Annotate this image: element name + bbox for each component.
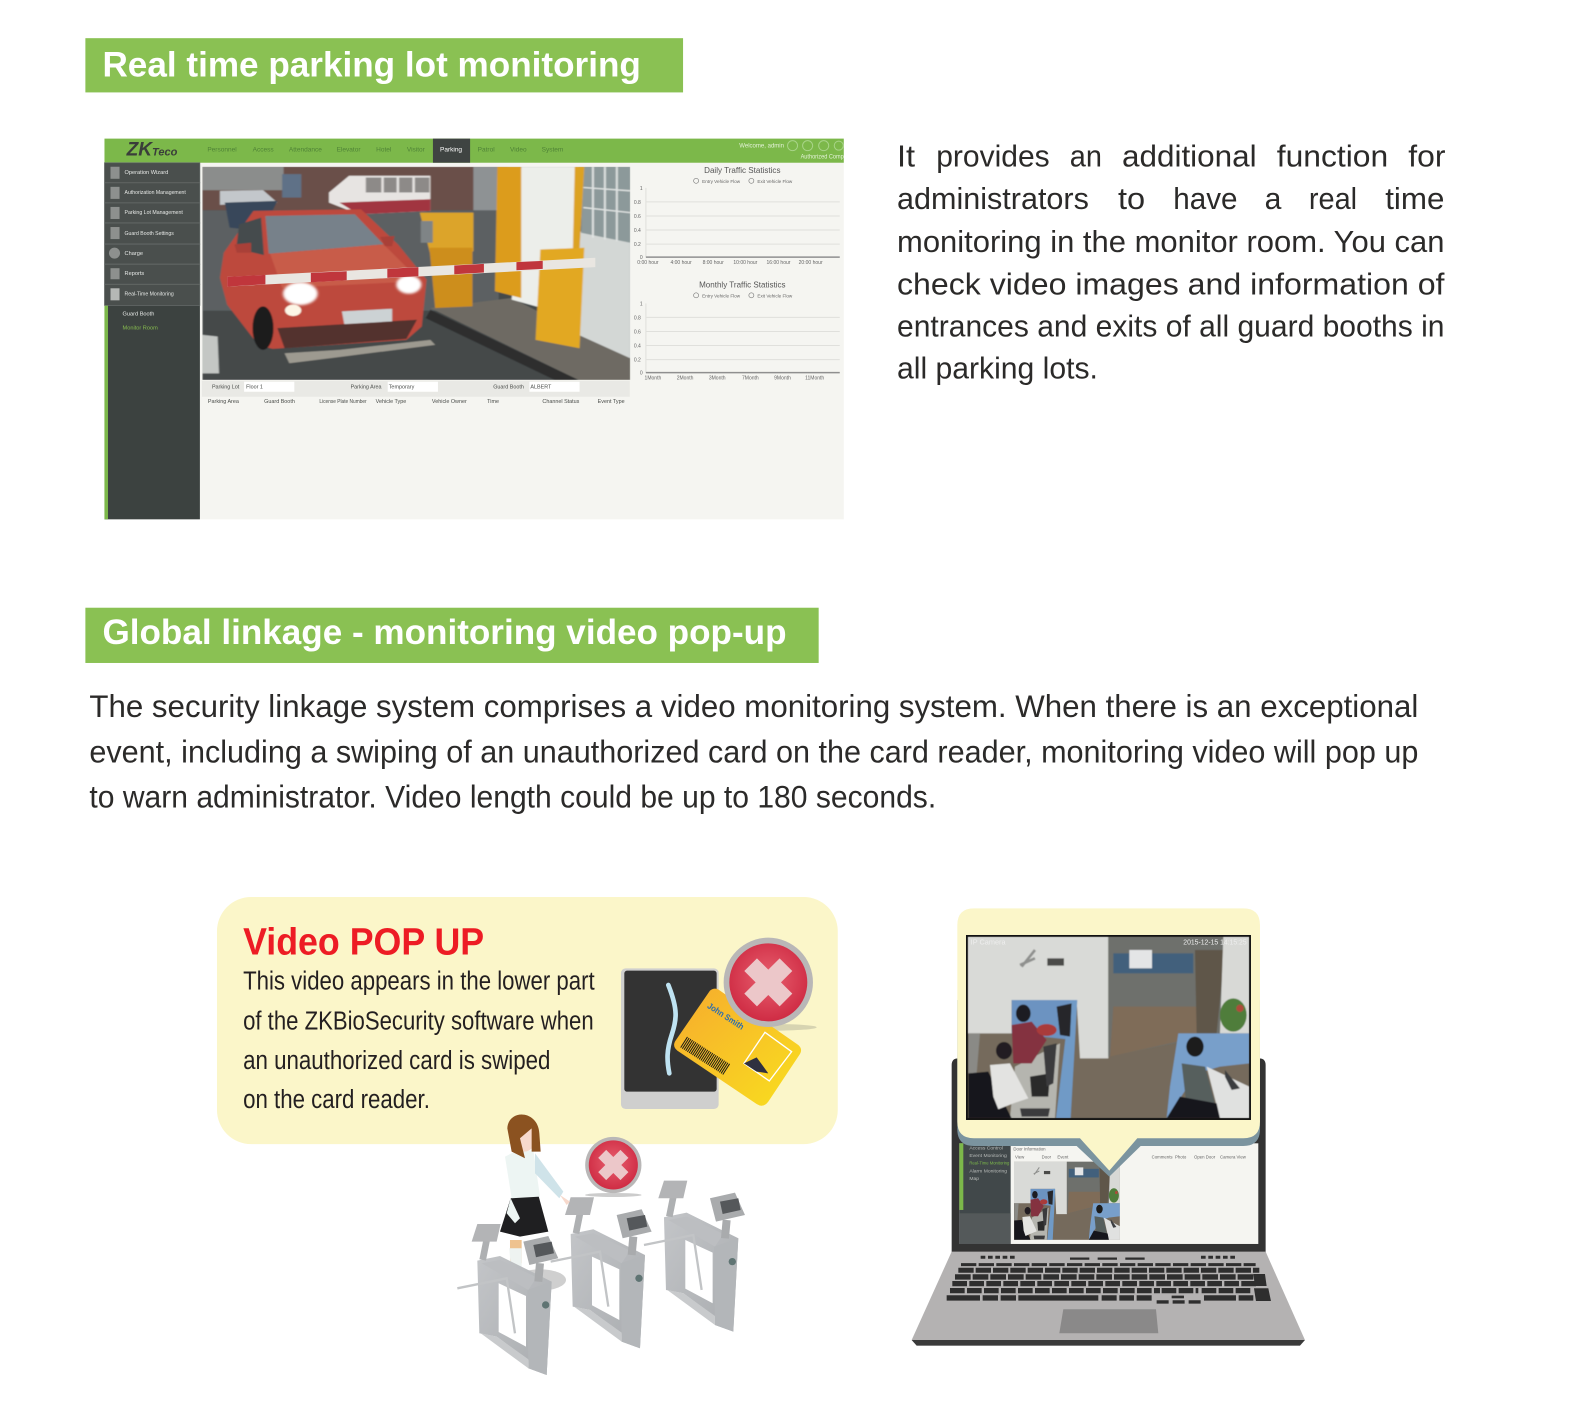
chart: daily traffic statistics: 0 [640, 255, 643, 261]
top navigation bar: Hotel [376, 147, 392, 154]
heading: global linkage: Global linkage - monitoring video pop-up [102, 613, 787, 652]
laptop screen: Camera View [1220, 1155, 1247, 1160]
filter row and table header: Parking Lot [212, 385, 240, 391]
chart: monthly traffic statistics: 11Month [805, 376, 824, 382]
text block: security linkage description: event, including a swiping of an unauthorized card on the card reader, monitoring video will pop up [89, 734, 1418, 769]
text block: real time monitoring description: real [1309, 183, 1357, 216]
sidebar menu: Parking Lot Management [125, 210, 183, 216]
text block: security linkage description: to warn administrator. Video length could be up to 180 seconds. [89, 780, 936, 815]
pop-up CCTV video: IP Camera [971, 937, 1006, 946]
chart: daily traffic statistics: 0:00 hour [637, 260, 659, 266]
parking lot camera photo [202, 167, 630, 380]
sidebar menu: Authorization Management [125, 190, 186, 196]
filter row and table header: Guard Booth [493, 385, 524, 391]
chart: monthly traffic statistics: 9Month [774, 376, 791, 382]
chart: daily traffic statistics: 16:00 hour [766, 260, 791, 266]
chart: daily traffic statistics: 8:00 hour [703, 260, 724, 266]
laptop screen [959, 1143, 1258, 1244]
illustration: laptop with video pop-up [912, 908, 1305, 1346]
heading: global linkage [85, 608, 819, 663]
chart: monthly traffic statistics: 2Month [677, 376, 694, 382]
text block: real time monitoring description: all parking lots. [897, 353, 1098, 386]
laptop screen: Photo [1175, 1155, 1187, 1160]
laptop screen: Event [1057, 1155, 1069, 1160]
text block: real time monitoring description: an [1070, 141, 1102, 174]
text block: real time monitoring description: entrances and exits of all guard booths in [897, 311, 1444, 344]
callout text: an unauthorized card is swiped [243, 1045, 550, 1075]
filter row and table header: License Plate Number [319, 399, 367, 405]
chart: daily traffic statistics: Daily Traffic Statistics [704, 166, 780, 175]
chart: daily traffic statistics: 4:00 hour [670, 260, 692, 266]
filter row and table header: Vehicle Owner [432, 399, 467, 405]
icon: small rejected mark [585, 1137, 642, 1197]
filter row and table header: Parking Area [351, 385, 382, 391]
filter row and table header: Guard Booth [264, 399, 295, 405]
woman [500, 1114, 570, 1267]
pop-up speech bubble [957, 908, 1260, 1177]
pop-up CCTV video [966, 935, 1251, 1120]
chart: monthly traffic statistics: Entry Vehicle Flow [702, 293, 741, 298]
sidebar menu: Guard Booth Settings [125, 231, 174, 237]
panel: parking software screenshot [104, 139, 844, 519]
callout text: This video appears in the lower part [243, 965, 595, 995]
text block: security linkage description: The security linkage system comprises a video monitoring system. When there is an exceptional [89, 689, 1418, 724]
laptop screen: Comments [1152, 1155, 1173, 1160]
callout text [243, 965, 595, 1114]
chart: monthly traffic statistics: 3Month [709, 376, 726, 382]
turnstile 3 [644, 1181, 745, 1332]
illustration: turnstile gates with woman [457, 1114, 745, 1375]
laptop screen: View [1015, 1155, 1025, 1160]
chart: daily traffic statistics: 10:00 hour [733, 260, 758, 266]
top navigation bar: Authorized Comp [801, 155, 844, 161]
chart: daily traffic statistics: 0.8 [634, 200, 641, 206]
laptop screen: Real-Time Monitoring [969, 1161, 1010, 1167]
text block: real time monitoring description: to [1118, 183, 1145, 216]
text block: real time monitoring description [897, 141, 1445, 386]
chart: monthly traffic statistics [634, 280, 840, 382]
sidebar menu: Monitor Room [123, 325, 158, 331]
text block: real time monitoring description: It [897, 141, 916, 174]
laptop screen: Door [1042, 1155, 1052, 1160]
top navigation bar: Access [253, 147, 274, 154]
text block: real time monitoring description: administrators [897, 183, 1089, 216]
filter row and table header [202, 381, 630, 405]
laptop screen: Event Monitoring [969, 1153, 1007, 1159]
chart: daily traffic statistics: 1 [640, 186, 643, 192]
filter row and table header: Vehicle Type [376, 399, 406, 405]
chart: monthly traffic statistics: 0.4 [634, 344, 641, 350]
chart: daily traffic statistics: Exit Vehicle Flow [757, 179, 793, 184]
icon: card reader with rejected card [621, 938, 817, 1109]
filter row and table header: Time [487, 399, 499, 405]
top navigation bar: Visitor [407, 147, 426, 154]
laptop screen: Open Door [1194, 1155, 1216, 1160]
turnstile 1 [457, 1224, 558, 1375]
heading: real time parking lot monitoring: Real time parking lot monitoring [102, 45, 641, 84]
chart: daily traffic statistics: 0.6 [634, 214, 641, 220]
callout text: of the ZKBioSecurity software when [243, 1006, 594, 1036]
filter row and table header: ALBERT [530, 385, 552, 391]
top navigation bar: Elevator [337, 147, 361, 154]
chart: monthly traffic statistics: 1 [640, 301, 643, 307]
laptop screen: Door Information [1013, 1147, 1046, 1152]
text block: real time monitoring description: check video images and information of [897, 268, 1445, 301]
top navigation bar: Welcome, admin [739, 144, 784, 150]
chart: monthly traffic statistics: 0.2 [634, 358, 641, 364]
chart: daily traffic statistics: 0.4 [634, 228, 641, 234]
text block: real time monitoring description: monitoring in the monitor room. You can [897, 226, 1444, 259]
sidebar menu: Reports [125, 271, 144, 277]
sidebar menu: Operation Wizard [125, 170, 168, 176]
chart: monthly traffic statistics: 0.8 [634, 315, 641, 321]
text block: real time monitoring description: for [1408, 141, 1445, 174]
text block: real time monitoring description: additional [1122, 141, 1257, 174]
filter row and table header: Channel Status [542, 399, 580, 405]
chart: monthly traffic statistics: 7Month [742, 376, 759, 382]
callout title: Video POP UP [243, 920, 484, 963]
laptop lid [952, 1058, 1266, 1253]
chart: monthly traffic statistics: Monthly Traffic Statistics [699, 280, 786, 289]
chart: monthly traffic statistics: 0.6 [634, 329, 641, 335]
top navigation bar: Personnel [207, 147, 237, 154]
filter row and table header: Temporary [389, 385, 415, 391]
text block: real time monitoring description: function [1277, 141, 1388, 174]
top navigation bar: Attendance [289, 147, 322, 154]
top navigation bar: ZKTeco [126, 140, 178, 161]
top navigation bar: Patrol [478, 147, 495, 154]
laptop screen: Map [969, 1176, 979, 1182]
text block: real time monitoring description: have [1173, 183, 1238, 216]
turnstile 2 [551, 1197, 652, 1348]
sidebar menu: Guard Booth [123, 311, 154, 317]
filter row and table header: Floor 1 [246, 385, 263, 391]
screen video thumbnail [1014, 1162, 1120, 1240]
laptop screen: Access Control [969, 1145, 1003, 1151]
text block: real time monitoring description: time [1385, 183, 1444, 216]
sidebar menu: Real-Time Monitoring [125, 291, 174, 297]
pop-up CCTV video: 2015-12-15 14:15:25 [1183, 937, 1247, 946]
panel: video pop up callout [217, 897, 838, 1144]
text block: real time monitoring description: a [1265, 183, 1282, 216]
chart: monthly traffic statistics: Exit Vehicle Flow [757, 293, 793, 298]
icon: card reader with rejected card: John Smith [706, 1001, 746, 1032]
filter row and table header: Event Type [598, 399, 625, 405]
top navigation bar: System [542, 147, 563, 154]
chart: daily traffic statistics: Entry Vehicle Flow [702, 179, 741, 184]
laptop base and keyboard [912, 1252, 1305, 1346]
chart: daily traffic statistics: 0.2 [634, 242, 641, 248]
filter row and table header: Parking Area [208, 399, 239, 405]
sidebar menu [104, 163, 200, 519]
top navigation bar: Video [510, 147, 527, 154]
top navigation bar [104, 139, 844, 163]
chart: daily traffic statistics [634, 166, 840, 266]
chart: monthly traffic statistics: 0 [640, 371, 643, 377]
heading: real time parking lot monitoring [85, 38, 683, 92]
chart: daily traffic statistics: 20:00 hour [799, 260, 823, 266]
laptop screen: Alarm Monitoring [969, 1168, 1007, 1174]
top navigation bar: Parking [440, 147, 462, 154]
text block: real time monitoring description: provides [936, 141, 1050, 174]
text block: security linkage description [89, 689, 1418, 815]
callout text: on the card reader. [243, 1084, 430, 1114]
chart: monthly traffic statistics: 1Month [645, 376, 661, 382]
sidebar menu: Charge [125, 251, 143, 257]
